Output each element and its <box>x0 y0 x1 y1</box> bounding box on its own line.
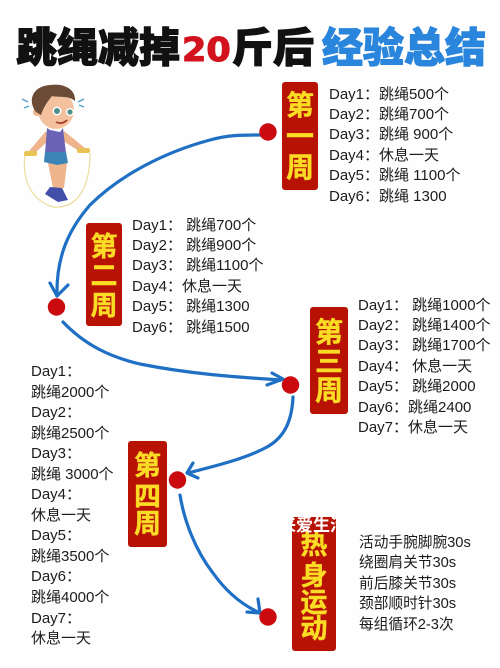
title <box>16 14 486 74</box>
title: 经验总结 <box>322 14 486 74</box>
panel: week 3 badge: 三 <box>315 340 343 380</box>
week 2 plan: Day1： 跳绳700个 Day2： 跳绳900个 Day3： 跳绳1100个 Day4：休息一天 Day5： 跳绳1300 Day6： 跳绳1500 <box>132 216 263 336</box>
panel: week 1 badge: 周 <box>286 146 314 186</box>
panel: week 2 badge: 二 <box>90 254 118 293</box>
panel: week 3 badge <box>310 307 348 414</box>
panel: week 2 badge <box>86 223 122 326</box>
panel: warm-up badge: 热 <box>300 523 328 562</box>
week 3 plan: Day1： 跳绳1000个 Day2： 跳绳1400个 Day3： 跳绳1700个 Day4： 休息一天 Day5： 跳绳2000 Day6：跳绳2400 Day7：休息一天 <box>358 296 491 436</box>
panel: week 4 badge: 周 <box>134 502 161 541</box>
panel: week 3 badge: 周 <box>315 369 343 409</box>
panel: warm-up badge: 动 <box>300 607 328 646</box>
panel: warm-up badge: 身 <box>300 554 328 593</box>
panel: week 1 badge <box>282 82 318 190</box>
week 4 plan: Day1： 跳绳2000个 Day2： 跳绳2500个 Day3： 跳绳 3000个 Day4： 休息一天 Day5： 跳绳3500个 Day6： 跳绳4000个 Day7： 休息一天 <box>31 363 114 647</box>
panel: week 2 badge: 周 <box>90 284 118 323</box>
warm-up plan: 活动手腕脚腕30s 绕圈肩关节30s 前后膝关节30s 颈部顺时针30s 每组循环2-3次 <box>359 535 471 633</box>
title: 跳绳减掉 <box>16 14 180 74</box>
week 1 plan: Day1：跳绳500个 Day2：跳绳700个 Day3：跳绳 900个 Day4：休息一天 Day5：跳绳 1100个 Day6：跳绳 1300 <box>329 86 460 205</box>
panel: week 2 badge: 第 <box>90 225 118 264</box>
panel: week 4 badge <box>128 441 167 547</box>
panel: week 3 badge: 第 <box>315 311 343 351</box>
panel: week 1 badge: 第 <box>286 84 314 124</box>
title: 20 <box>182 30 231 69</box>
panel: week 4 badge: 四 <box>134 475 161 514</box>
panel: warm-up badge: 运 <box>300 581 328 620</box>
panel: warm-up badge <box>292 517 336 651</box>
panel: week 1 badge: 一 <box>286 115 314 155</box>
title: 斤后 <box>232 14 314 74</box>
panel: week 4 badge: 第 <box>134 444 161 483</box>
